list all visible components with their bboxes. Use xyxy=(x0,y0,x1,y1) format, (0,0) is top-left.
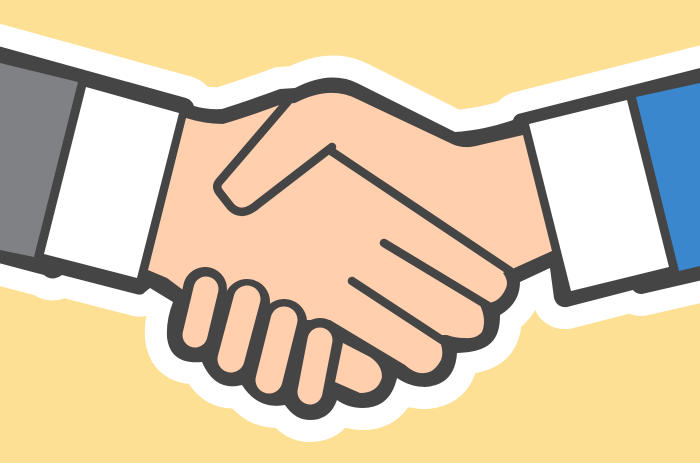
palm fragment below fingers xyxy=(335,343,382,393)
finger fills xyxy=(195,289,320,392)
left cuff: white xyxy=(44,87,179,278)
thumb outline xyxy=(217,99,332,212)
hands: skin xyxy=(148,93,552,373)
finger outlines xyxy=(195,289,320,392)
right sleeve: blue xyxy=(636,83,700,271)
lower finger line xyxy=(352,281,448,344)
thumb and finger lines xyxy=(217,99,510,344)
fingers xyxy=(195,289,320,392)
middle finger line xyxy=(384,243,490,307)
left sleeve: gray xyxy=(0,63,78,257)
right cuff: white xyxy=(529,100,669,291)
upper finger line xyxy=(331,151,510,271)
